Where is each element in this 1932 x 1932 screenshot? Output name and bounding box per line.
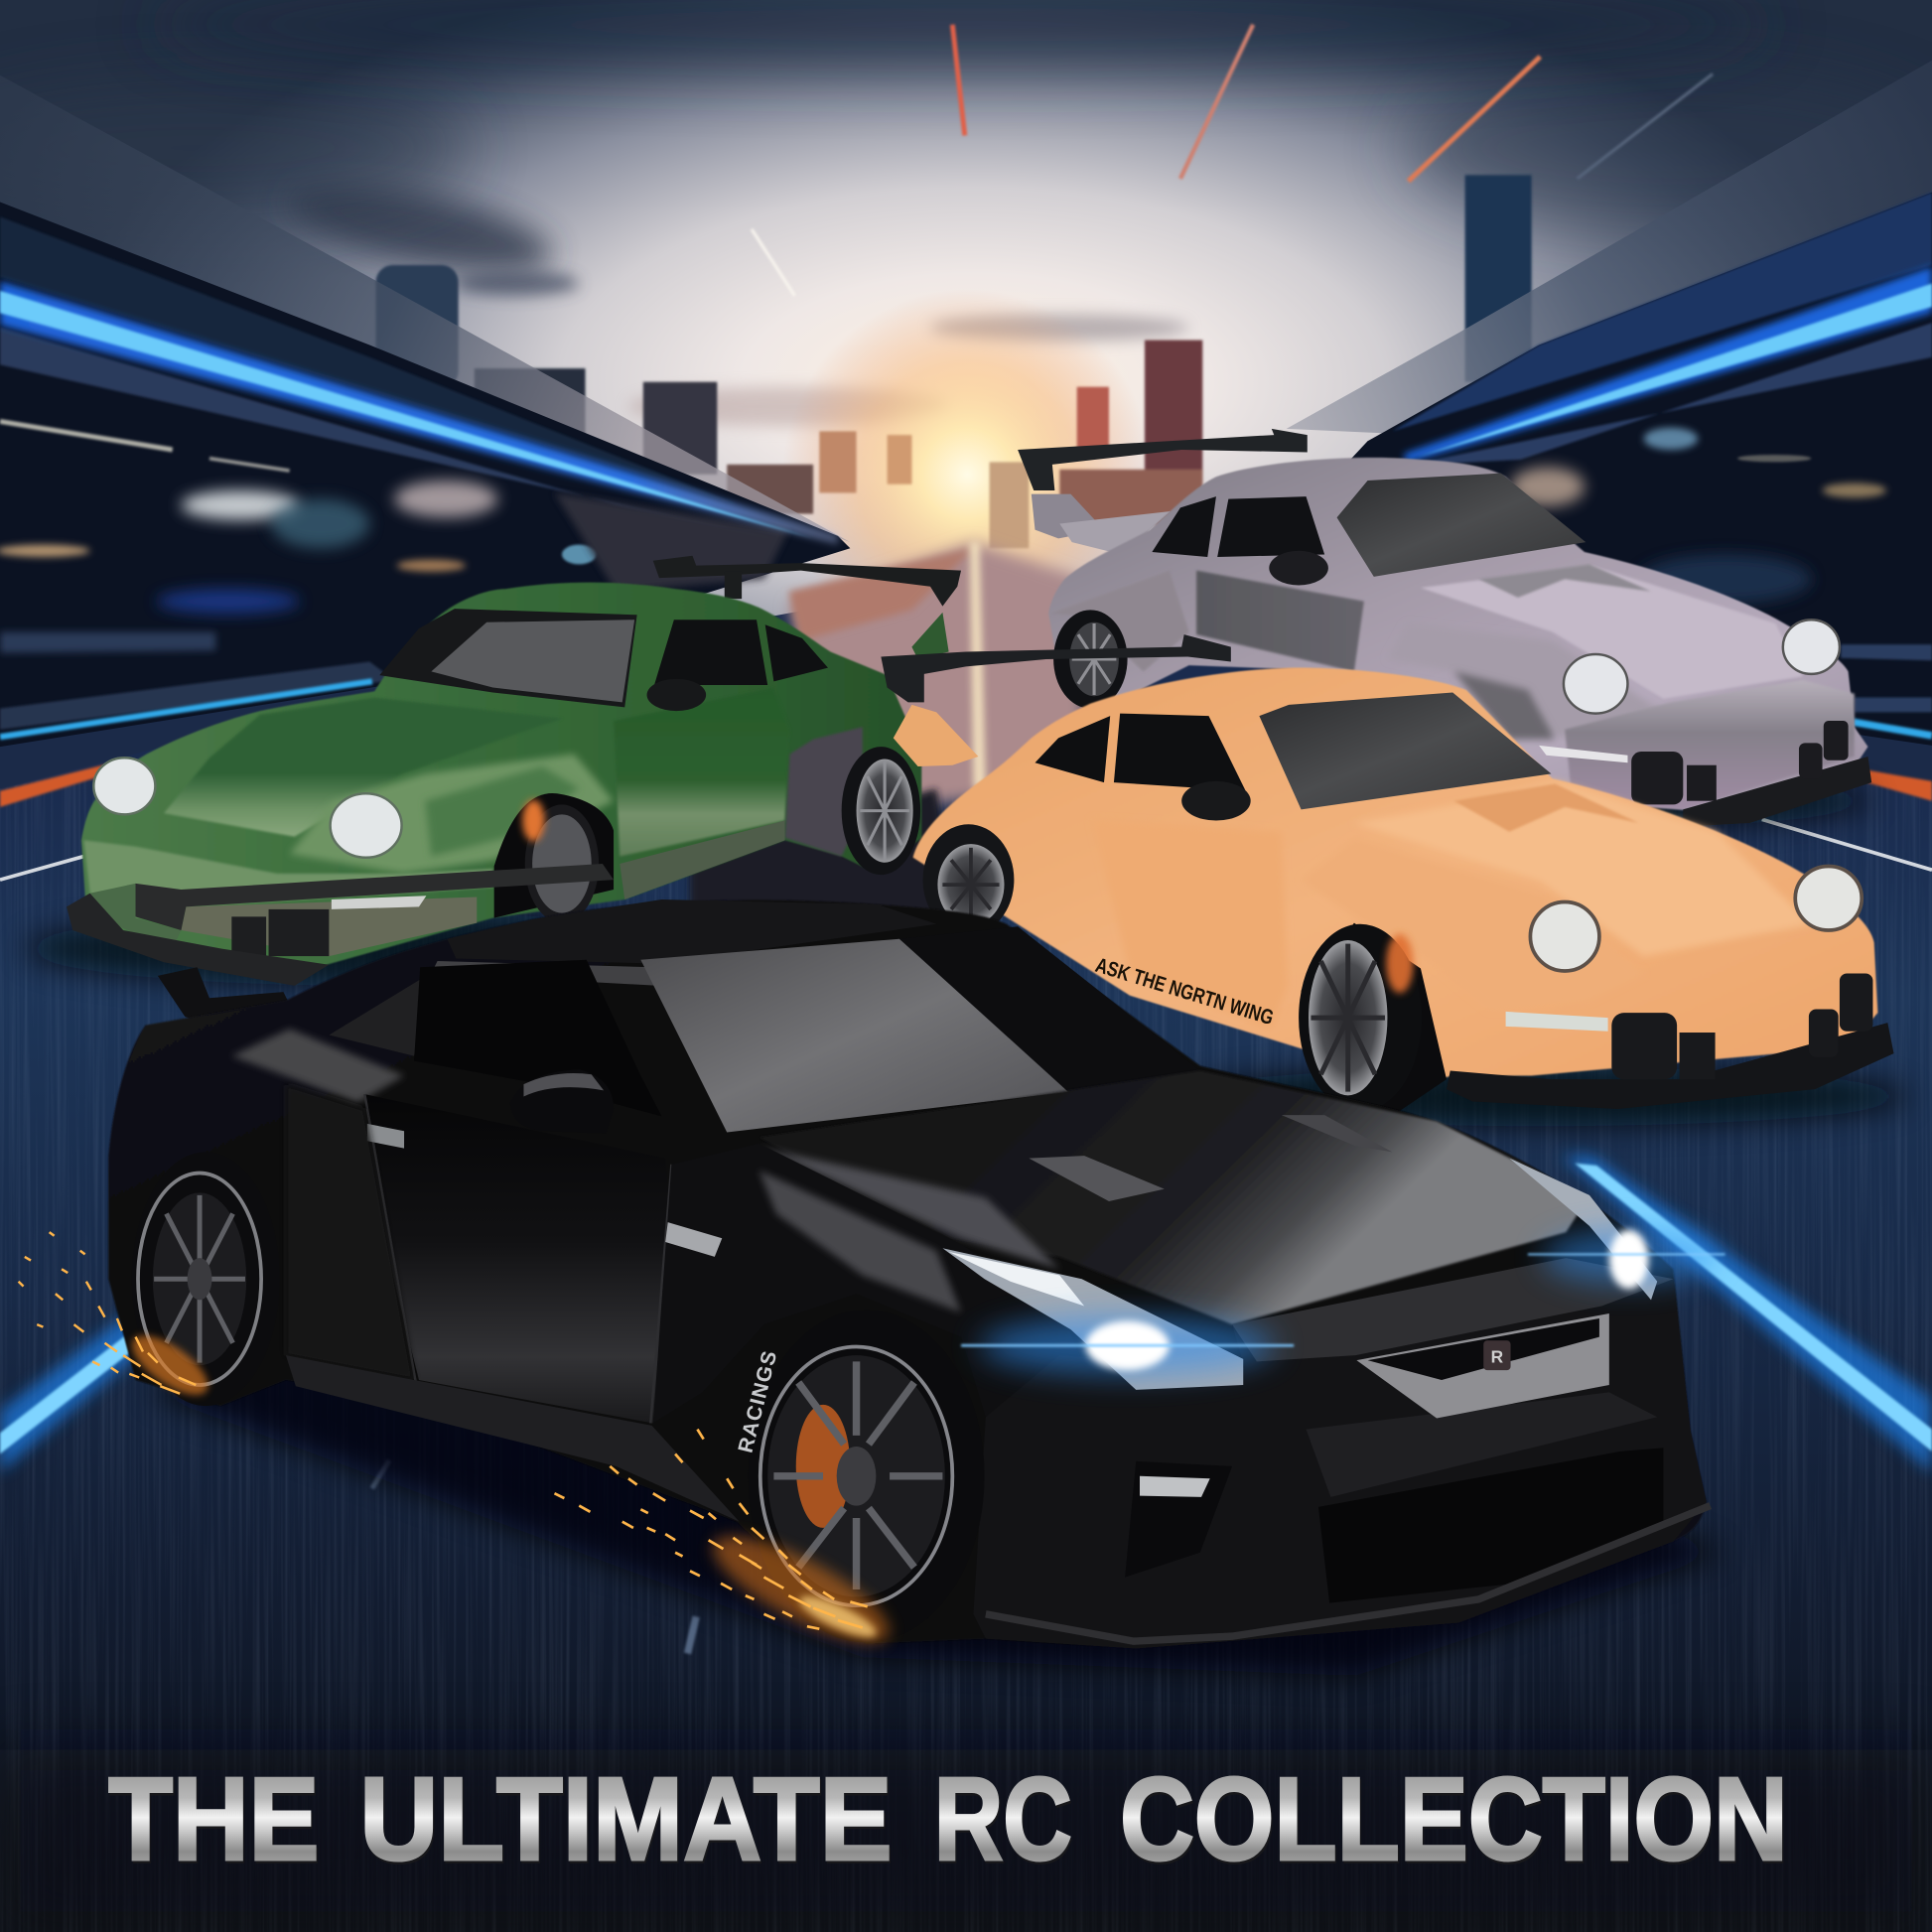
car: green coupe (25, 556, 961, 986)
wing mirror (510, 1069, 614, 1134)
front bumper (1565, 680, 1855, 809)
front wheel (735, 1310, 985, 1642)
headlights (93, 758, 402, 858)
headlights and vents (1539, 620, 1849, 804)
roof (448, 899, 936, 964)
background: city skyline (376, 175, 1532, 548)
background: road surface (0, 542, 1932, 1932)
left headlight (942, 1248, 1294, 1390)
front wheel: RACINGS (735, 1347, 782, 1455)
title: COLLECTION (1120, 1753, 1788, 1885)
windows (1152, 474, 1586, 577)
front bumper (83, 840, 492, 918)
headlights (1530, 866, 1862, 971)
wheels (522, 747, 920, 923)
sky light streaks (752, 25, 1713, 296)
front fascia (973, 1258, 1707, 1649)
windows (1035, 692, 1552, 809)
door (614, 688, 790, 857)
rear wing (1018, 429, 1308, 554)
sparks: rear wheel (19, 1232, 217, 1406)
fender (1387, 623, 1663, 740)
car: orange coupe (881, 634, 1910, 1126)
side skirt (286, 1355, 740, 1522)
wheels (923, 824, 1422, 1111)
wheel arch (1302, 923, 1447, 1115)
upper grille (1356, 1313, 1609, 1418)
door (1196, 571, 1364, 671)
rear quarter lower (286, 1084, 414, 1380)
car: black GT-R hero (19, 899, 1725, 1676)
wheel (1053, 610, 1128, 709)
lower grille (1318, 1448, 1663, 1603)
splitter (1683, 757, 1871, 827)
fender (290, 755, 614, 874)
right headlight (1509, 1159, 1725, 1300)
title: ULTIMATE (359, 1753, 893, 1885)
body silhouette (108, 899, 1707, 1649)
windshield (640, 926, 1200, 1133)
door (1092, 819, 1288, 1029)
overlapping orange-car wing (136, 864, 614, 930)
splitter (67, 894, 329, 986)
fog vent (1125, 1461, 1232, 1578)
background: right motion-blurred structure (1287, 61, 1932, 813)
rear wing (653, 556, 961, 659)
front splitter (1447, 1023, 1894, 1109)
GT-R badge (1483, 1340, 1511, 1370)
hood (1354, 781, 1811, 956)
hood (1421, 566, 1803, 699)
rear wing stub (158, 967, 290, 1029)
wheel arch (494, 793, 614, 918)
front splitter (986, 1506, 1711, 1641)
rear wing (881, 634, 1231, 766)
rear quarter highlight (231, 1029, 404, 1103)
title: RC (934, 1753, 1072, 1885)
door panel (364, 1094, 671, 1423)
rear fender (1051, 571, 1189, 671)
body (81, 583, 921, 973)
title (108, 1753, 1788, 1885)
front fender (653, 1144, 1084, 1423)
side sill (620, 821, 785, 899)
hood (164, 697, 563, 837)
rear flank (785, 727, 863, 857)
lower bumper (181, 897, 477, 956)
front fender (1302, 838, 1644, 1011)
body (913, 668, 1877, 1084)
car: silver-lilac coupe (1018, 429, 1872, 830)
sidebar lettering: ASK THE NGRTN WING (1093, 954, 1276, 1030)
side windows (329, 960, 661, 1116)
neon light trails (0, 266, 1932, 1654)
body (1048, 458, 1867, 809)
GT-R badge: R (1491, 1347, 1504, 1367)
background: sky (0, 0, 1932, 813)
background: left motion-blurred structure (0, 75, 850, 813)
title: THE (108, 1753, 319, 1885)
hood (759, 1070, 1588, 1324)
rear wheel (132, 1152, 280, 1406)
windows (379, 609, 828, 707)
sparks: front wheel (554, 1430, 901, 1662)
front vents (1506, 973, 1872, 1079)
